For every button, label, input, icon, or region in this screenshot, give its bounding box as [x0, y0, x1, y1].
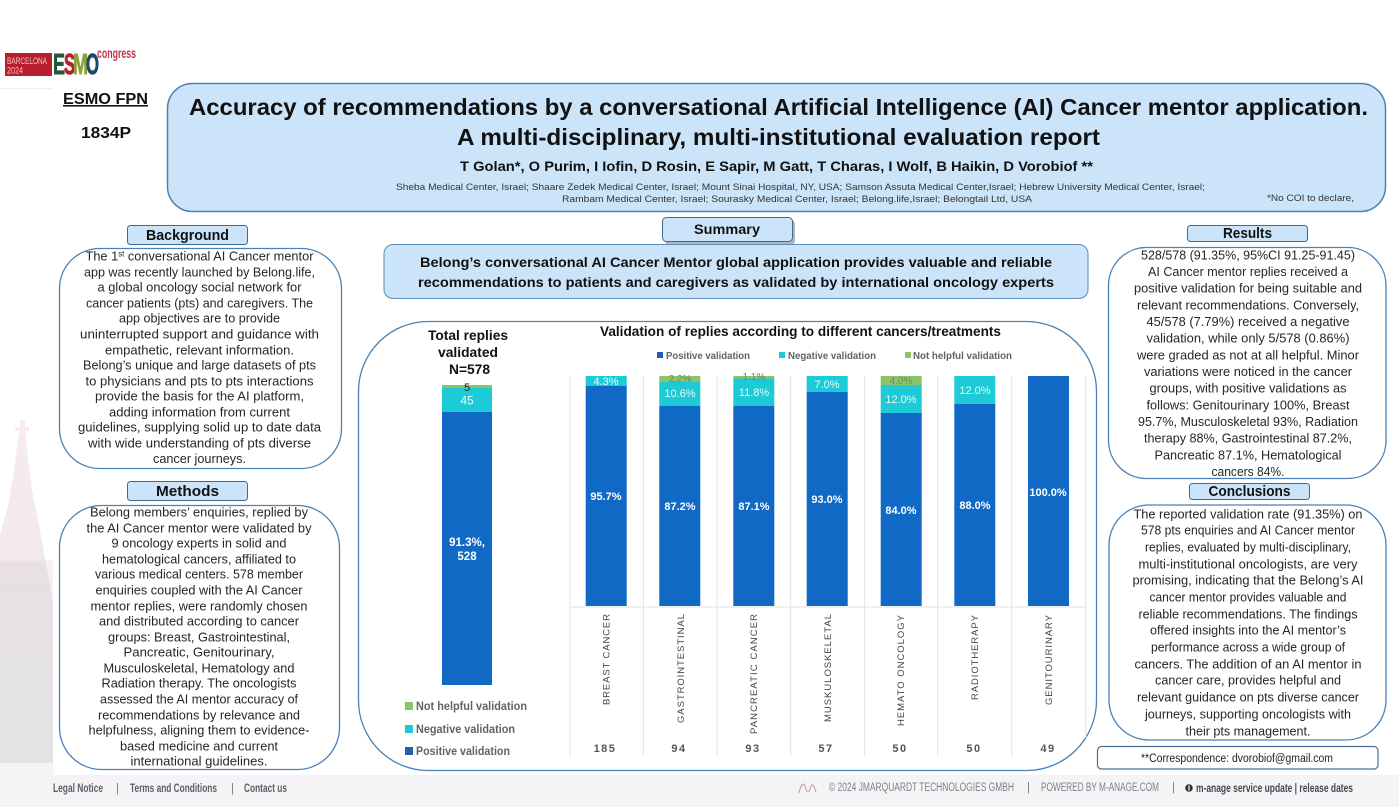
panel: conclusions: reliable recommendations. The findings — [1138, 606, 1358, 622]
bar: radiotherapy: 88.0% — [959, 500, 991, 512]
poster code: 1834P — [81, 125, 131, 142]
panel: conclusions: promising, indicating that the Belong’s AI — [1132, 572, 1364, 588]
panel: conclusions: cancer care, provides helpful and — [1155, 672, 1341, 688]
bar: genitourinary: 49 — [1040, 743, 1056, 755]
bar: breast cancer: 4.3% — [593, 376, 619, 388]
title: A multi-disciplinary, multi-institutional evaluation report — [457, 124, 1100, 150]
panel: conclusions: relevant guidance on pts diverse cancer — [1137, 690, 1360, 704]
legend: total chart: Positive validation — [416, 746, 510, 758]
panel: conclusions: cancer mentor provides valuable and — [1150, 590, 1346, 604]
legend: total chart: Negative validation — [416, 724, 515, 736]
bar: gastrointestinal: 87.2% — [664, 501, 696, 513]
footer links: Contact us — [244, 783, 287, 795]
panel: background: to physicians and pts to pts interactions — [86, 374, 314, 388]
panel: background: st — [118, 250, 125, 258]
panel: background: guidelines, supplying solid up to date data — [78, 420, 322, 434]
panel: background: The 1 — [86, 248, 119, 264]
panel: background — [60, 248, 342, 468]
panel: results: 528/578 (91.35%, 95%CI 91.25-91.45) — [1141, 248, 1355, 262]
panel: conclusions: 578 pts enquiries and AI Cancer mentor — [1141, 522, 1356, 538]
stacked bar: total: 91.3%, — [449, 537, 485, 549]
logo: ESMO Barcelona 2024 congress: E — [53, 49, 65, 81]
results heading — [1188, 225, 1308, 242]
panel: results: were graded as not at all helpful. Minor — [1136, 348, 1360, 362]
title panel — [168, 84, 1386, 212]
footer credits: | — [1172, 782, 1175, 794]
panel: background: uninterrupted support and guidance with — [80, 326, 319, 342]
correspondence box — [1098, 746, 1378, 769]
panel: results: 45/578 (7.79%) received a negative — [1146, 314, 1350, 329]
bar: hemato oncology: 12.0% — [885, 394, 917, 406]
bar: gastrointestinal: 10.6% — [664, 388, 696, 400]
logo: ESMO Barcelona 2024 congress: M — [73, 49, 88, 81]
footer bar — [0, 763, 1399, 807]
logo: ESMO Barcelona 2024 congress: congress — [97, 45, 136, 61]
background: cathedral tower silhouette — [0, 420, 53, 763]
bar: pancreatic cancer — [733, 372, 774, 755]
bar: radiotherapy: 50 — [966, 743, 982, 755]
footer links: | — [116, 783, 119, 795]
summary statement — [384, 244, 1088, 298]
methods heading — [128, 482, 248, 500]
summary statement: Belong’s conversational AI Cancer Mentor global application provides valuable and reliable — [420, 254, 1052, 270]
panel: charts — [358, 322, 1096, 770]
legend: cancer chart: Negative validation — [788, 351, 876, 362]
panel: methods: enquiries coupled with the AI Cancer — [96, 582, 303, 598]
affiliations: Rambam Medical Center, Israel; Sourasky Medical Center, Israel; Belong.life,Israel; Belongtail Ltd, USA — [562, 194, 1033, 205]
bar: hemato oncology: 84.0% — [885, 505, 917, 517]
panel: methods: Radiation therapy. The oncologists — [102, 676, 297, 690]
bar: gastrointestinal: 94 — [671, 743, 687, 755]
panel: conclusions: journeys, supporting oncologists with — [1144, 706, 1351, 722]
bar: breast cancer: 185 — [594, 743, 616, 755]
bar: genitourinary: 100.0% — [1029, 487, 1067, 499]
bar: hemato oncology: HEMATO ONCOLOGY — [896, 614, 907, 726]
bar: gastrointestinal: GASTROINTESTINAL — [676, 614, 687, 723]
affiliations — [396, 182, 1354, 205]
affiliations: *No COI to declare, — [1267, 193, 1354, 204]
title: Accuracy of recommendations by a conversational Artificial Intelligence (AI) Cancer mentor application. — [189, 94, 1368, 120]
panel: methods — [60, 504, 340, 770]
panel: results: variations were noticed in the cancer — [1144, 364, 1353, 379]
panel: methods: assessed the AI mentor accuracy of — [100, 692, 298, 706]
results heading: Results — [1223, 225, 1272, 242]
bar: musculoskeletal: 7.0% — [814, 379, 840, 391]
bar: breast cancer — [586, 376, 627, 755]
conclusions heading: Conclusions — [1208, 483, 1290, 500]
panel: methods: international guidelines. — [130, 754, 268, 768]
panel: background: cancer patients (pts) and caregivers. The — [86, 296, 313, 310]
panel: conclusions: replies, evaluated by multi-disciplinary, — [1145, 540, 1351, 554]
panel: background: app objectives are to provide — [119, 310, 280, 326]
panel: background: empathetic, relevant information. — [105, 342, 294, 358]
bar: genitourinary — [1028, 376, 1069, 755]
legend: cancer chart: Not helpful validation — [913, 351, 1012, 362]
panel: results: relevant recommendations. Conversely, — [1137, 298, 1359, 312]
bar: hemato oncology: 4.0% — [890, 376, 913, 387]
bar: musculoskeletal: 57 — [818, 743, 834, 755]
background heading: Background — [146, 227, 229, 244]
panel: methods: recommendations by relevance and — [98, 708, 300, 722]
footer credits — [799, 782, 1353, 795]
panel: background: with wide understanding of pts diverse — [87, 436, 311, 450]
chart title: total replies — [428, 327, 508, 377]
legend: total chart — [405, 701, 527, 758]
logo: ESMO Barcelona 2024 congress: S — [64, 49, 75, 81]
legend: total chart: Not helpful validation — [416, 701, 527, 713]
panel: methods: and distributed according to cancer — [99, 614, 300, 628]
panel: methods: various medical centers. 578 member — [95, 566, 304, 582]
bar: gastrointestinal — [659, 374, 700, 755]
bar: musculoskeletal: MUSKULOSKELETAL — [823, 614, 834, 722]
bar: radiotherapy: RADIOTHERAPY — [970, 614, 981, 700]
panel: methods: Belong members’ enquiries, replied by — [90, 504, 308, 520]
panel: conclusions: performance across a wide group of — [1151, 640, 1345, 654]
panel: background: adding information from current — [109, 404, 290, 420]
summary heading — [662, 218, 795, 245]
bar: radiotherapy — [954, 376, 995, 755]
panel: conclusions — [1109, 505, 1386, 740]
panel: results: 95.7%, Musculoskeletal 93%, Radiation — [1138, 414, 1358, 429]
panel: methods: the AI Cancer mentor were validated by — [86, 520, 312, 536]
logo: ESMO Barcelona 2024 congress: O — [86, 49, 99, 81]
panel: methods: 9 oncology experts in solid and — [112, 536, 286, 550]
footer links: Legal Notice — [53, 783, 103, 795]
panel: background: app was recently launched by Belong.life, — [84, 264, 315, 280]
panel: results: validation, while only 5/578 (0.86%) — [1146, 330, 1350, 346]
chart: validation by cancer type — [570, 324, 1086, 756]
panel: methods: helpfulness, aligning them to evidence- — [88, 722, 310, 738]
panel: background: a global oncology social network for — [98, 280, 302, 294]
stacked bar: total: 5 — [464, 382, 470, 394]
panel: results — [1108, 248, 1386, 479]
panel: conclusions: their pts management. — [1186, 724, 1310, 738]
panel: methods: hematological cancers, affiliated to — [102, 552, 296, 566]
bar: pancreatic cancer: 11.8% — [739, 387, 769, 399]
poster code — [63, 91, 148, 142]
footer credits: © 2024 JMARQUARDT TECHNOLOGIES GMBH — [829, 782, 1014, 794]
chart title: total replies: Total replies — [428, 327, 508, 343]
methods heading: Methods — [156, 483, 219, 500]
bar: pancreatic cancer: 87.1% — [738, 501, 770, 513]
bar: genitourinary: GENITOURINARY — [1044, 614, 1055, 705]
summary heading: Summary — [694, 221, 760, 237]
bar: breast cancer: 95.7% — [590, 491, 622, 503]
stacked bar: total: 528 — [457, 551, 477, 563]
panel: results: AI Cancer mentor replies received a — [1148, 264, 1349, 279]
summary statement: recommendations to patients and caregivers as validated by international oncology experts — [418, 274, 1054, 290]
chart title: total replies: validated — [438, 344, 498, 360]
footer credits: POWERED BY M-ANAGE.COM — [1041, 782, 1159, 794]
panel: background: provide the basis for the AI platform, — [95, 388, 304, 404]
stacked bar: total — [442, 382, 492, 685]
logo: ESMO Barcelona 2024 congress: 2024 — [7, 66, 23, 76]
stacked bar: total: 45 — [460, 394, 474, 408]
title — [189, 94, 1368, 150]
bar: gastrointestinal: 2.2% — [669, 374, 692, 385]
footer links: Terms and Conditions — [130, 783, 217, 795]
logo: ESMO Barcelona 2024 congress — [0, 45, 136, 89]
bar: hemato oncology: 50 — [892, 743, 908, 755]
bar: pancreatic cancer: 1.1% — [743, 372, 766, 383]
panel: methods: mentor replies, were randomly chosen — [90, 598, 308, 614]
chart: total replies validated — [405, 327, 527, 758]
bar: pancreatic cancer: PANCREATIC CANCER — [749, 614, 760, 734]
panel: results: follows: Genitourinary 100%, Breast — [1146, 398, 1350, 412]
bar: hemato oncology — [881, 376, 922, 755]
poster code: ESMO FPN — [63, 91, 148, 108]
panel: results: groups, with positive validations as — [1150, 380, 1347, 396]
footer links — [53, 783, 287, 795]
footer links: | — [231, 783, 234, 795]
panel: background: cancer journeys. — [153, 451, 246, 466]
background heading — [128, 226, 248, 244]
legend: cancer chart — [657, 351, 1012, 362]
panel: results: positive validation for being suitable and — [1134, 280, 1362, 296]
panel: methods: Pancreatic, Genitourinary, — [124, 644, 274, 660]
panel: conclusions: offered insights into the AI mentor’s — [1150, 622, 1346, 638]
bar: breast cancer: BREAST CANCER — [602, 614, 612, 705]
panel: background: Belong’s unique and large datasets of pts — [83, 358, 316, 372]
bar: musculoskeletal — [807, 376, 848, 755]
chart title: validation of replies: Validation of replies according to different cancers/treatments — [600, 324, 1001, 339]
panel: methods: based medicine and current — [120, 738, 278, 754]
panel: results: cancers 84%. — [1212, 464, 1284, 479]
panel: methods: Musculoskeletal, Hematology and — [104, 660, 294, 676]
panel: conclusions: multi-institutional oncologists, are very — [1138, 556, 1358, 572]
panel: methods: groups: Breast, Gastrointestinal, — [108, 630, 290, 644]
logo: ESMO Barcelona 2024 congress: BARCELONA — [7, 56, 47, 66]
footer credits: | — [1027, 782, 1030, 794]
bar: radiotherapy: 12.0% — [959, 385, 991, 397]
panel: conclusions: The reported validation rate (91.35%) on — [1134, 506, 1362, 522]
panel: conclusions: cancers. The addition of an AI mentor in — [1134, 656, 1362, 672]
authors: T Golan*, O Purim, I Iofin, D Rosin, E Sapir, M Gatt, T Charas, I Wolf, B Haikin, D Vorobiof ** — [460, 158, 1094, 174]
correspondence box: **Correspondence: dvorobiof@gmail.com — [1141, 753, 1333, 765]
legend: cancer chart: Positive validation — [666, 351, 750, 362]
chart title: total replies: N=578 — [449, 361, 490, 377]
affiliations: Sheba Medical Center, Israel; Shaare Zedek Medical Center, Israel; Mount Sinai Hospital, NY, USA; Samson Assuta Medical Center,Israel; Hebrew University Medical Center, Israel; — [396, 182, 1205, 193]
bar: musculoskeletal: 93.0% — [811, 494, 843, 506]
panel: results: Pancreatic 87.1%, Hematological — [1154, 448, 1342, 462]
panel: results: therapy 88%, Gastrointestinal 87.2%, — [1144, 430, 1352, 446]
panel: background: conversational AI Cancer mentor — [124, 248, 314, 264]
bar: pancreatic cancer: 93 — [745, 743, 761, 755]
